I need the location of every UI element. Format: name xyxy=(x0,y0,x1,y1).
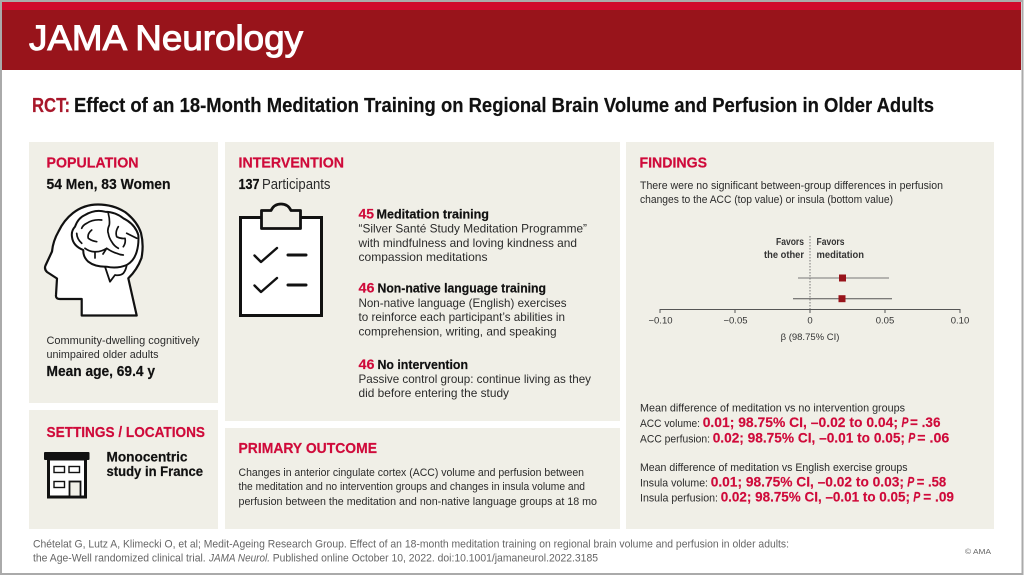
text block: non-native language arm: Non-native language (English) exercises xyxy=(358,296,566,310)
text block: no intervention arm: No intervention xyxy=(378,357,468,372)
header banner xyxy=(2,2,1021,70)
text block: meditation training arm: with mindfulness and loving kindness and xyxy=(358,236,577,250)
panel: population: unimpaired older adults xyxy=(46,349,159,361)
panel: population: POPULATION xyxy=(46,155,138,172)
text block: meditation vs English exercise results xyxy=(640,462,954,504)
text block: meditation vs English exercise results: Insula perfusion: xyxy=(640,492,718,504)
panel: intervention: Participants xyxy=(262,177,330,193)
panel: settings and locations: SETTINGS / LOCATIONS xyxy=(46,424,205,441)
panel: population: Mean age, 69.4 y xyxy=(46,363,156,380)
icon: building xyxy=(44,452,90,497)
text block: meditation vs no intervention results: ACC volume: xyxy=(640,418,700,430)
panel: settings and locations xyxy=(29,410,218,529)
forest plot chart: Favors xyxy=(816,237,845,248)
axis: 0 xyxy=(807,316,813,326)
forest plot chart: meditation xyxy=(816,250,864,261)
icon: head with brain xyxy=(45,204,143,316)
text block: non-native language arm xyxy=(358,280,566,338)
text block: meditation training arm: Meditation training xyxy=(376,206,489,221)
text block: meditation vs no intervention results: 0.01; 98.75% CI, –0.02 to 0.04; xyxy=(703,414,898,430)
panel: settings and locations: Monocentric xyxy=(106,450,188,465)
citation: Chételat G, Lutz A, Klimecki O, et al; Medit-Ageing Research Group. Effect of an 18-month meditation training on regional brain volume and perfusion in older adults: xyxy=(33,539,789,551)
panel: population xyxy=(29,142,218,403)
panel: findings: There were no significant between-group differences in perfusion xyxy=(640,180,943,192)
panel: findings xyxy=(626,142,994,529)
text block: non-native language arm: comprehension, writing, and speaking xyxy=(358,324,556,338)
panel: findings: FINDINGS xyxy=(640,155,707,172)
title: Effect of an 18-Month Meditation Training on Regional Brain Volume and Perfusion in Older Adults xyxy=(74,95,934,117)
citation xyxy=(33,539,789,565)
text block: meditation vs English exercise results: P xyxy=(907,474,915,490)
text block: meditation vs no intervention results xyxy=(640,403,950,446)
panel: primary outcome: Changes in anterior cingulate cortex (ACC) volume and perfusion between xyxy=(238,467,584,479)
text block: meditation vs English exercise results: 0.02; 98.75% CI, –0.01 to 0.05; xyxy=(721,488,910,504)
text block: no intervention arm xyxy=(358,356,591,400)
axis: −0.10 xyxy=(648,316,673,326)
panel: intervention xyxy=(225,142,620,421)
text block: meditation vs no intervention results: = .06 xyxy=(917,430,950,446)
text block: meditation training arm: compassion meditations xyxy=(358,250,488,264)
panel: primary outcome: PRIMARY OUTCOME xyxy=(238,440,377,457)
text block: meditation vs English exercise results: Mean difference of meditation vs English exercise groups xyxy=(640,462,908,474)
panel: findings: changes to the ACC (top value) or insula (bottom value) xyxy=(640,194,893,206)
text block: meditation vs no intervention results: ACC perfusion: xyxy=(640,434,710,446)
text block: meditation vs English exercise results: = .09 xyxy=(923,488,954,504)
panel: primary outcome xyxy=(225,428,620,529)
text block: non-native language arm: 46 xyxy=(358,280,375,296)
text block: meditation vs no intervention results: P xyxy=(908,430,916,446)
copyright: © AMA xyxy=(965,547,991,556)
citation: JAMA Neurol. xyxy=(208,553,270,565)
panel: population: Community-dwelling cognitively xyxy=(46,335,200,347)
forest plot chart: Favors xyxy=(776,237,804,248)
text block: meditation vs no intervention results: = .36 xyxy=(910,414,941,430)
axis xyxy=(648,310,969,343)
text block: meditation training arm xyxy=(358,205,587,264)
axis: −0.05 xyxy=(723,316,748,326)
citation: the Age-Well randomized clinical trial. xyxy=(33,553,206,565)
axis: 0.05 xyxy=(876,316,894,326)
text block: meditation vs no intervention results: P xyxy=(902,414,909,430)
text block: non-native language arm: Non-native language training xyxy=(378,281,546,296)
text block: no intervention arm: 46 xyxy=(358,356,375,372)
axis: 0.10 xyxy=(951,316,969,326)
ACC row: estimate and interval xyxy=(798,274,889,282)
panel: intervention: INTERVENTION xyxy=(238,155,344,172)
text block: meditation training arm: “Silver Santé Study Meditation Programme” xyxy=(358,222,587,236)
panel: settings and locations: study in France xyxy=(106,464,203,479)
panel: population: 54 Men, 83 Women xyxy=(46,177,170,193)
panel: primary outcome: the meditation and no intervention groups and changes in insula volume and xyxy=(238,481,585,493)
title: RCT: xyxy=(32,95,70,117)
panel: primary outcome: perfusion between the meditation and non-native language groups at 18 mo xyxy=(238,496,597,508)
journal name: JAMA Neurology xyxy=(29,19,304,58)
text block: non-native language arm: to reinforce each participant’s abilities in xyxy=(358,310,565,324)
insula row: estimate and interval xyxy=(793,295,892,302)
text block: meditation vs English exercise results: P xyxy=(913,488,921,504)
text block: meditation vs no intervention results: 0.02; 98.75% CI, –0.01 to 0.05; xyxy=(713,430,905,446)
text block: meditation vs no intervention results: Mean difference of meditation vs no intervention groups xyxy=(640,403,906,415)
forest plot chart: the other xyxy=(764,250,804,261)
forest plot chart xyxy=(648,236,969,343)
panel: intervention: 137 xyxy=(238,177,260,193)
text block: meditation vs English exercise results: = .58 xyxy=(917,474,946,490)
text block: meditation vs English exercise results: 0.01; 98.75% CI, –0.02 to 0.03; xyxy=(711,474,904,490)
icon: clipboard checklist xyxy=(240,204,322,316)
text block: no intervention arm: did before entering the study xyxy=(358,386,509,400)
citation: Published online October 10, 2022. doi:10.1001/jamaneurol.2022.3185 xyxy=(273,553,598,565)
text block: no intervention arm: Passive control group: continue living as they xyxy=(358,372,591,386)
text block: meditation vs English exercise results: Insula volume: xyxy=(640,478,708,490)
text block: meditation training arm: 45 xyxy=(358,205,374,221)
axis: β (98.75% CI) xyxy=(781,332,839,343)
